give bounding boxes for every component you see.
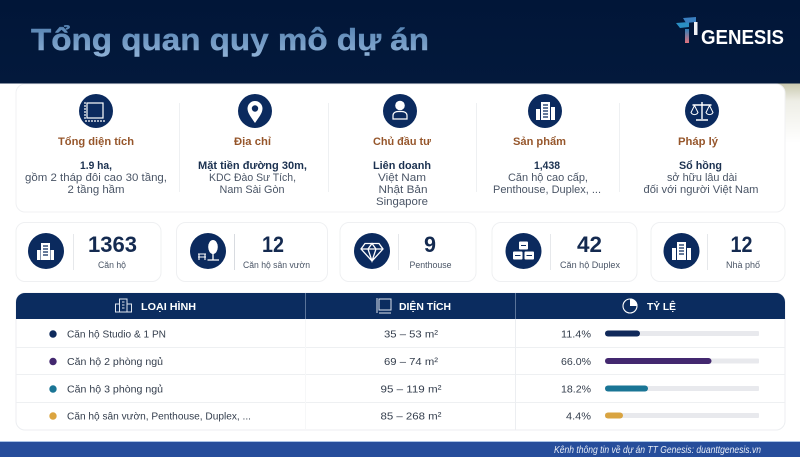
icon: area header — [377, 298, 391, 313]
item: products: Căn hộ cao cấp, — [508, 172, 588, 184]
item: legal — [644, 94, 758, 196]
table header: DIỆN TÍCH — [399, 300, 451, 313]
stat card: townhouses — [651, 222, 785, 282]
row: studio and 1 bedroom: Căn hộ Studio & 1 PN — [67, 328, 166, 340]
logo: Genesis — [676, 17, 784, 49]
stat card: townhouses: 12 — [730, 232, 752, 257]
icon: diamond — [354, 233, 390, 269]
item: products: 1,438 — [534, 160, 560, 172]
item: total area — [25, 94, 167, 196]
item: products: Sản phẩm — [513, 136, 566, 148]
row: garden, penthouse, duplex: 85 – 268 m² — [380, 410, 442, 422]
row: garden, penthouse, duplex — [49, 410, 759, 422]
stat card: garden apartments: Căn hộ sân vườn — [243, 260, 310, 270]
item: legal: Sổ hồng — [679, 160, 722, 172]
background photo strip — [770, 83, 800, 143]
row: 2 bedrooms: 69 – 74 m² — [384, 356, 439, 368]
row: studio and 1 bedroom: 11.4% — [561, 328, 591, 340]
table header: TỶ LỆ — [647, 300, 676, 313]
item: legal: Pháp lý — [678, 136, 719, 148]
row: 2 bedrooms: Căn hộ 2 phòng ngủ — [67, 356, 163, 368]
item: legal: đối với người Việt Nam — [644, 184, 758, 196]
icon: tree and bench — [190, 233, 226, 269]
stat card: apartments — [16, 222, 161, 282]
item: total area: 1.9 ha, — [80, 160, 112, 172]
stat card: penthouse: Penthouse — [410, 260, 452, 270]
row: garden, penthouse, duplex: 4.4% — [566, 410, 591, 422]
stat card: apartments: Căn hộ — [98, 260, 126, 270]
logo: Genesis: GENESIS — [701, 27, 784, 49]
icon: stacked units — [506, 233, 542, 269]
icon: area frame — [79, 94, 113, 128]
item: products — [493, 94, 601, 196]
item: total area: 2 tầng hầm — [68, 184, 124, 196]
item: developer: Liên doanh — [373, 160, 431, 172]
row: garden, penthouse, duplex: Căn hộ sân vườn, Penthouse, Duplex, ... — [67, 410, 251, 422]
icon: apartment building — [28, 233, 64, 269]
row: studio and 1 bedroom — [49, 328, 759, 340]
item: developer — [373, 94, 431, 208]
icon: buildings — [528, 94, 562, 128]
row: 2 bedrooms: 66.0% — [561, 356, 591, 368]
item: address — [198, 94, 307, 196]
row: 3 bedrooms: 95 – 119 m² — [380, 384, 442, 396]
icon: pie chart header — [623, 298, 638, 313]
item: products: Penthouse, Duplex, ... — [493, 184, 601, 196]
stat card: apartments: 1363 — [88, 232, 137, 257]
item: address: KDC Đào Sư Tích, — [209, 172, 296, 184]
stat card: garden apartments — [176, 222, 328, 282]
table header: LOẠI HÌNH — [141, 300, 196, 313]
footer text: Kênh thông tin về dự án TT Genesis: duanttgenesis.vn — [554, 444, 761, 456]
item: developer: Singapore — [376, 196, 428, 208]
icon: person — [383, 94, 417, 128]
table header — [16, 293, 785, 319]
item: developer: Nhật Bản — [378, 184, 428, 196]
panel: project overview — [16, 84, 785, 212]
row: 3 bedrooms: Căn hộ 3 phòng ngủ — [67, 384, 163, 396]
stat card: penthouse — [340, 222, 476, 282]
icon: building header — [115, 299, 132, 312]
item: total area: gồm 2 tháp đôi cao 30 tầng, — [25, 172, 167, 184]
row: 3 bedrooms: 18.2% — [561, 384, 591, 396]
stat card: duplex: 42 — [577, 232, 602, 257]
stat card: duplex: Căn hộ Duplex — [560, 260, 620, 270]
stat card: townhouses: Nhà phố — [726, 260, 760, 270]
item: developer: Việt Nam — [378, 172, 426, 184]
item: developer: Chủ đầu tư — [373, 136, 431, 148]
item: legal: sở hữu lâu dài — [667, 172, 737, 184]
title: Tổng quan quy mô dự án — [31, 22, 429, 57]
table: unit types — [16, 293, 785, 430]
icon: townhouse buildings — [664, 233, 700, 269]
footer band — [0, 441, 800, 457]
stat card: penthouse: 9 — [424, 232, 436, 257]
header band — [0, 0, 800, 84]
item: address: Địa chỉ — [234, 136, 271, 148]
item: address: Nam Sài Gòn — [220, 184, 284, 196]
item: address: Mặt tiền đường 30m, — [198, 160, 307, 172]
item: total area: Tổng diện tích — [58, 136, 134, 148]
stat card: garden apartments: 12 — [262, 232, 284, 257]
icon: scales — [685, 94, 719, 128]
row: 2 bedrooms — [49, 356, 759, 368]
stat card: duplex — [492, 222, 637, 282]
row: studio and 1 bedroom: 35 – 53 m² — [384, 328, 439, 340]
icon: map pin — [238, 94, 272, 128]
row: 3 bedrooms — [49, 384, 759, 396]
